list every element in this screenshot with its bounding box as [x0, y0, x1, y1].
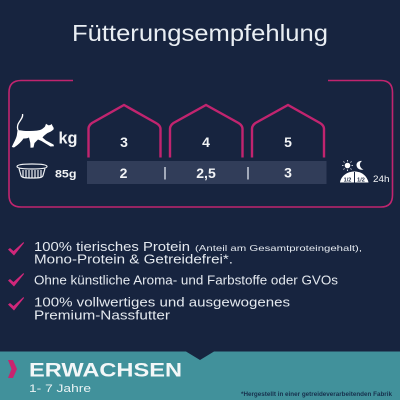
heading: ERWACHSEN: ERWACHSEN — [29, 360, 182, 382]
benefit 1: (Anteil am Gesamtproteingehalt), — [195, 243, 362, 253]
label: 24h: 24h — [373, 174, 390, 184]
chevron — [8, 360, 17, 378]
weight numbers: 5 — [284, 134, 292, 150]
icon: day and night split — [340, 160, 368, 184]
pink frame — [9, 80, 392, 207]
label: 85g: 85g — [55, 168, 76, 180]
benefit 1 — [34, 239, 362, 266]
check 3 — [8, 297, 24, 310]
portion values: 2 — [120, 165, 128, 181]
icon: cat — [12, 114, 54, 148]
portion values — [120, 164, 292, 181]
portion values: 2,5 — [196, 165, 216, 181]
portion band — [87, 161, 326, 184]
house 1 — [88, 105, 160, 158]
subheading: age: 1- 7 Jahre — [29, 383, 91, 395]
weight numbers — [120, 134, 292, 150]
label: kg: kg — [58, 130, 78, 148]
weight numbers: 3 — [120, 134, 128, 150]
benefit 3 — [34, 294, 291, 322]
check 2 — [8, 273, 24, 286]
benefit 2: Ohne künstliche Aroma- und Farbstoffe oder GVOs — [34, 272, 339, 288]
title: Fütterungsempfehlung — [72, 20, 328, 46]
benefit 1: Mono-Protein & Getreidefrei*. — [34, 252, 233, 266]
icon: day and night split: 1/2 — [344, 178, 351, 184]
portion values: 3 — [284, 164, 292, 180]
benefit 3: Premium-Nassfutter — [34, 307, 171, 322]
bottom teal banner — [0, 352, 400, 400]
footnote: *Hergestellt in einer getreideverarbeitenden Fabrik — [241, 392, 393, 398]
icon: day and night split: 1/2 — [357, 178, 365, 184]
icon: food tray — [17, 164, 47, 178]
check 1 — [8, 242, 24, 256]
band separators — [165, 167, 248, 180]
house 3 — [252, 105, 324, 158]
weight numbers: 4 — [202, 134, 210, 150]
benefit 3: 100% vollwertiges und ausgewogenes — [34, 294, 291, 310]
house 2 — [170, 105, 242, 158]
benefit 1: 100% tierisches Protein — [34, 239, 190, 254]
